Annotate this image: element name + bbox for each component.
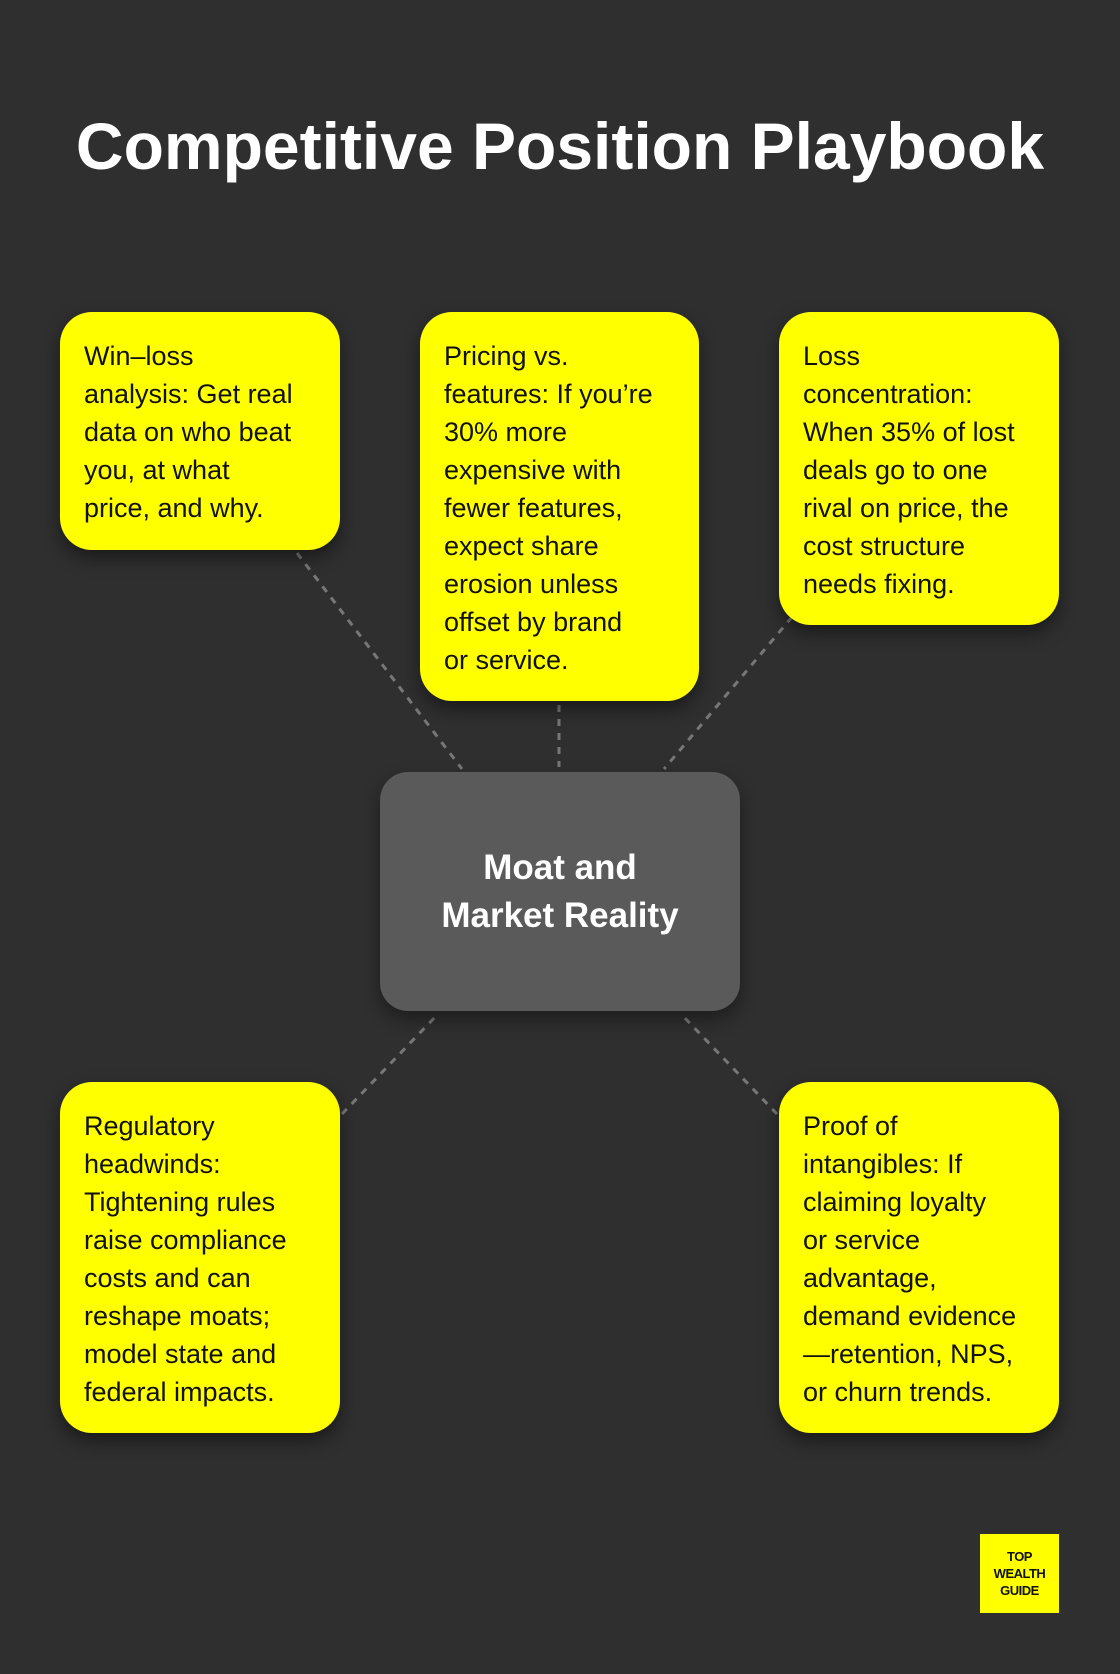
center: moat and market reality: Market Reality xyxy=(441,896,679,934)
box: regulatory headwinds: federal impacts. xyxy=(84,1377,275,1407)
box: regulatory headwinds: costs and can xyxy=(84,1263,251,1293)
box: loss concentration: concentration: xyxy=(803,379,973,409)
box: pricing vs features xyxy=(420,312,699,701)
box: loss concentration xyxy=(779,312,1059,625)
box: win-loss analysis: analysis: Get real xyxy=(84,379,293,409)
box: proof of intangibles: claiming loyalty xyxy=(803,1187,986,1217)
box: regulatory headwinds: reshape moats; xyxy=(84,1301,270,1331)
logo: TOP xyxy=(1007,1549,1032,1564)
title: Competitive Position Playbook xyxy=(76,109,1044,183)
box: pricing vs features: Pricing vs. xyxy=(444,341,569,371)
box: pricing vs features: or service. xyxy=(444,645,569,675)
box: proof of intangibles: demand evidence xyxy=(803,1301,1016,1331)
box: proof of intangibles xyxy=(779,1082,1059,1433)
center: moat and market reality: Moat and xyxy=(483,848,637,886)
logo: WEALTH xyxy=(994,1566,1045,1581)
box: proof of intangibles: Proof of xyxy=(803,1111,898,1141)
box: proof of intangibles: intangibles: If xyxy=(803,1149,962,1179)
box: proof of intangibles: or churn trends. xyxy=(803,1377,992,1407)
box: pricing vs features: features: If you’re xyxy=(444,379,653,409)
box: loss concentration: needs fixing. xyxy=(803,569,955,599)
box: pricing vs features: expect share xyxy=(444,531,599,561)
box: loss concentration: Loss xyxy=(803,341,860,371)
box: proof of intangibles: —retention, NPS, xyxy=(803,1339,1013,1369)
box: regulatory headwinds: Tightening rules xyxy=(84,1187,275,1217)
box: loss concentration: cost structure xyxy=(803,531,965,561)
box: win-loss analysis: you, at what xyxy=(84,455,230,485)
box: regulatory headwinds: Regulatory xyxy=(84,1111,215,1141)
box: regulatory headwinds xyxy=(60,1082,340,1433)
box: loss concentration: deals go to one xyxy=(803,455,988,485)
box: pricing vs features: offset by brand xyxy=(444,607,622,637)
box: pricing vs features: fewer features, xyxy=(444,493,623,523)
box: win-loss analysis xyxy=(60,312,340,550)
box: regulatory headwinds: model state and xyxy=(84,1339,276,1369)
center: moat and market reality xyxy=(380,772,740,1011)
logo: GUIDE xyxy=(1000,1583,1039,1598)
box: win-loss analysis: data on who beat xyxy=(84,417,291,447)
box: proof of intangibles: or service xyxy=(803,1225,920,1255)
box: win-loss analysis: Win–loss xyxy=(84,341,194,371)
box: win-loss analysis: price, and why. xyxy=(84,493,264,523)
box: loss concentration: rival on price, the xyxy=(803,493,1009,523)
box: regulatory headwinds: headwinds: xyxy=(84,1149,221,1179)
box: proof of intangibles: advantage, xyxy=(803,1263,937,1293)
box: pricing vs features: expensive with xyxy=(444,455,621,485)
box: regulatory headwinds: raise compliance xyxy=(84,1225,287,1255)
logo xyxy=(980,1534,1059,1613)
box: pricing vs features: 30% more xyxy=(444,417,567,447)
box: pricing vs features: erosion unless xyxy=(444,569,618,599)
box: loss concentration: When 35% of lost xyxy=(803,417,1015,447)
